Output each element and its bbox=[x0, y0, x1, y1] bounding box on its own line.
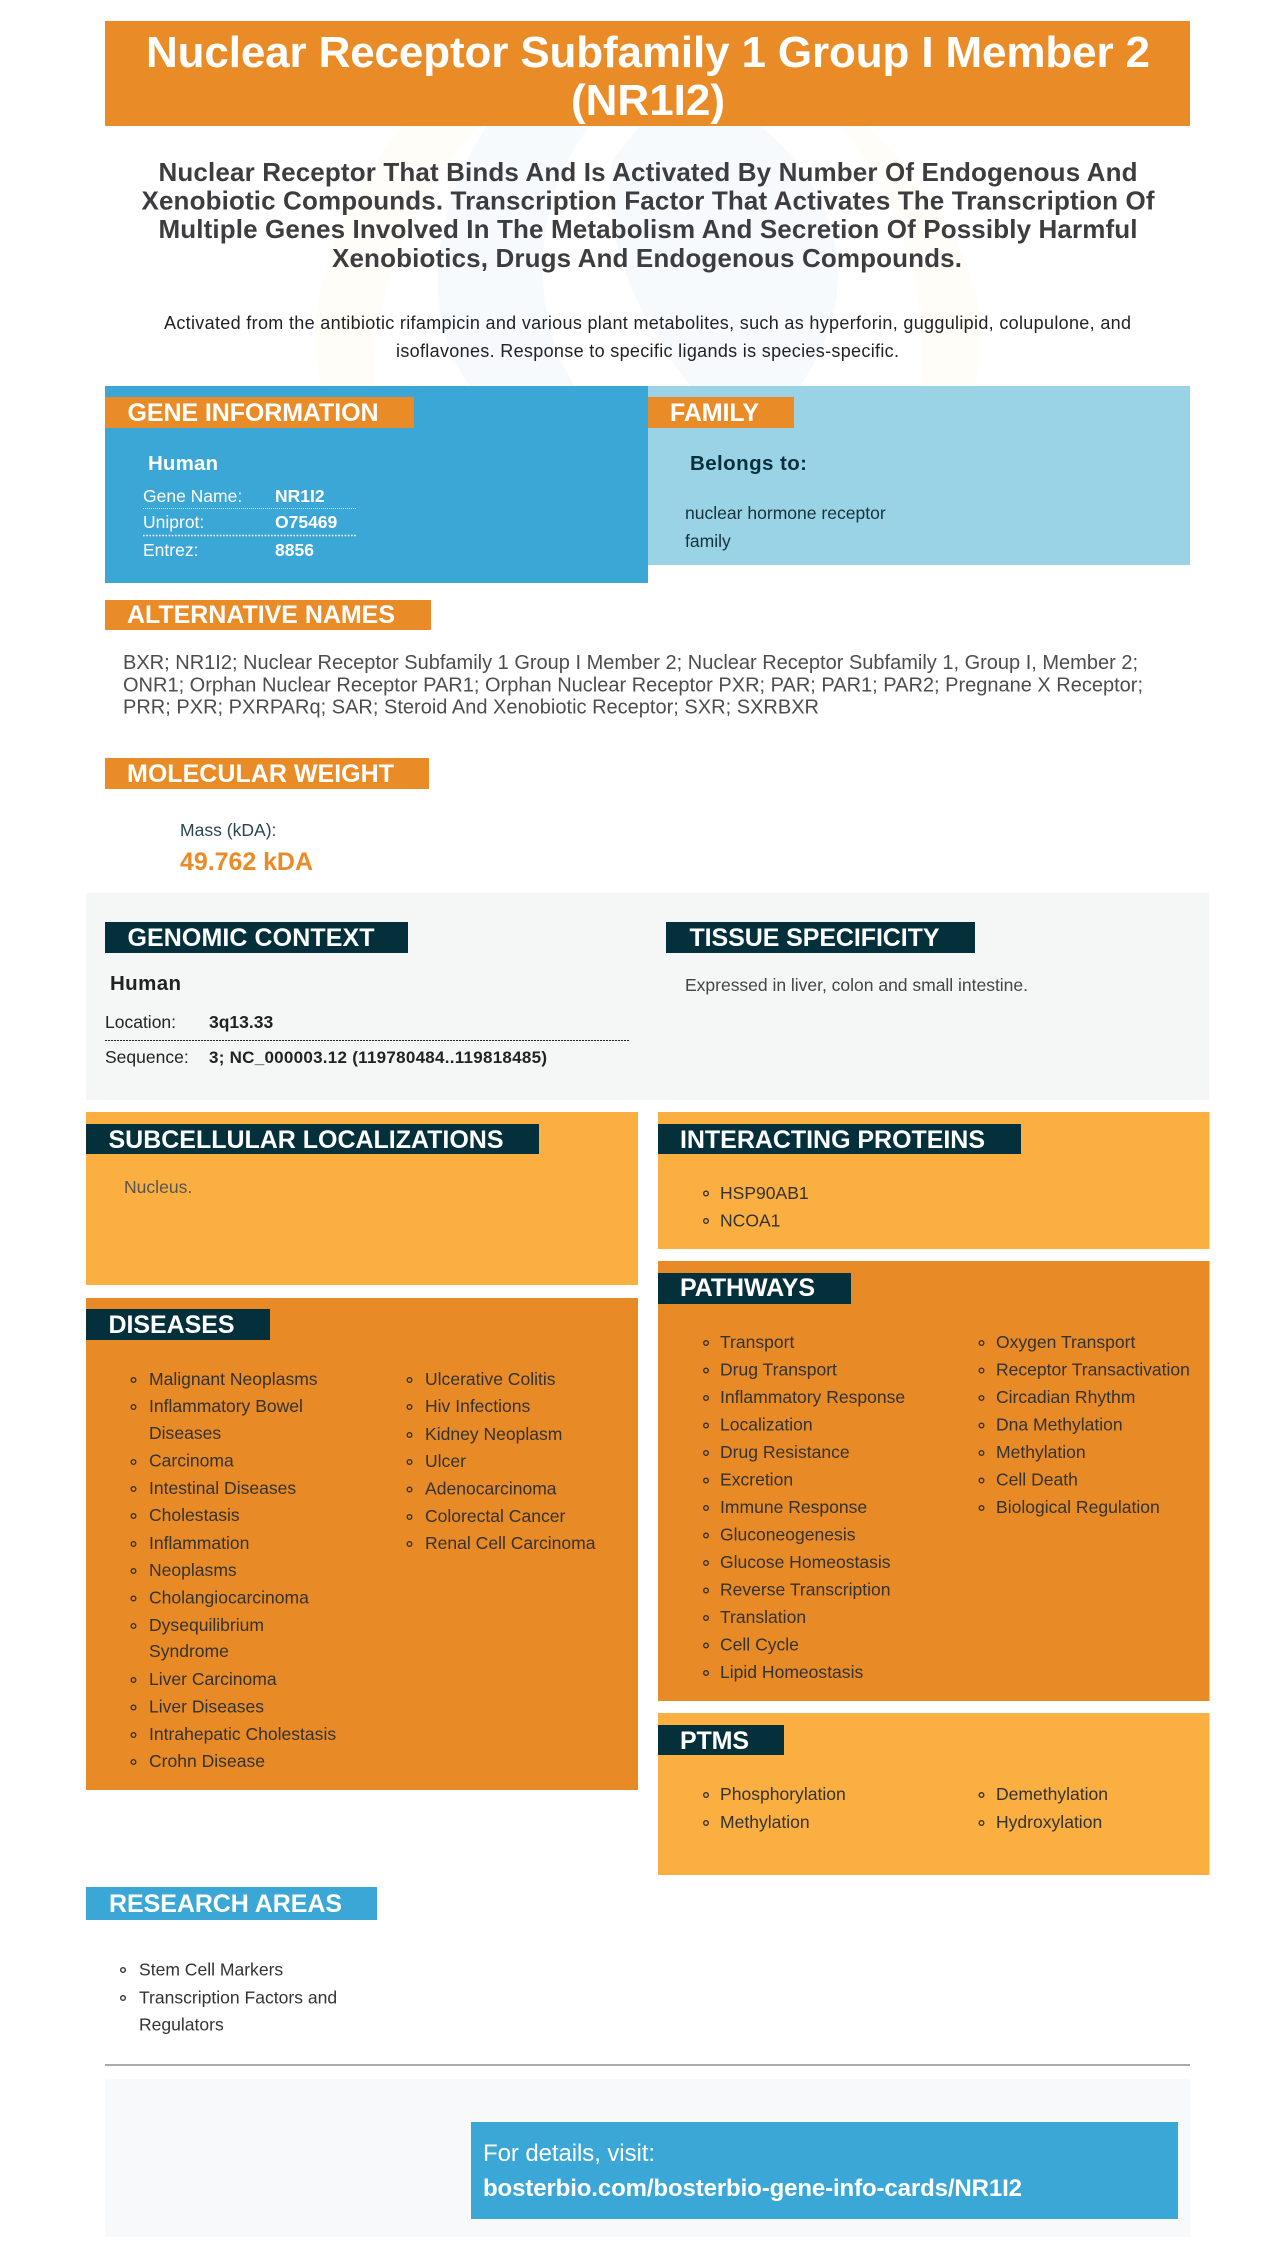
description text bbox=[164, 313, 1131, 361]
research areas list: Stem Cell Markers bbox=[139, 1960, 283, 1980]
pathways list column 2: Oxygen Transport bbox=[996, 1332, 1135, 1352]
pathways list column 1: Immune Response bbox=[720, 1497, 867, 1517]
callout: details link: bosterbio.com/bosterbio-gene-info-cards/NR1I2 bbox=[483, 2175, 1022, 2202]
tissue specificity text: Expressed in liver, colon and small intestine. bbox=[685, 975, 1028, 995]
panel: ptms bbox=[658, 1713, 1210, 1875]
diseases list column 1: Intrahepatic Cholestasis bbox=[149, 1724, 336, 1744]
species label: Human bbox=[148, 452, 218, 475]
subtitle: Xenobiotic Compounds. Transcription Factor That Activates The Transcription Of bbox=[142, 186, 1155, 216]
heading: pathways bbox=[658, 1273, 851, 1304]
localization text: Nucleus. bbox=[124, 1177, 192, 1197]
heading: alternative names: ALTERNATIVE NAMES bbox=[127, 601, 395, 629]
diseases list column 2: Adenocarcinoma bbox=[425, 1478, 557, 1498]
subtitle bbox=[142, 157, 1155, 273]
pathways list column 1: Translation bbox=[720, 1607, 806, 1627]
heading: interacting proteins: INTERACTING PROTEINS bbox=[680, 1126, 985, 1154]
title banner: Nuclear Receptor Subfamily 1 Group I Member 2 bbox=[146, 28, 1150, 77]
research areas list bbox=[121, 1960, 337, 2034]
pathways list column 1: Glucose Homeostasis bbox=[720, 1552, 891, 1572]
pathways list column 1: Drug Transport bbox=[720, 1360, 837, 1380]
diseases list column 1: Malignant Neoplasms bbox=[149, 1369, 318, 1389]
diseases list column 2: Colorectal Cancer bbox=[425, 1506, 565, 1526]
diseases list column 1: Carcinoma bbox=[149, 1450, 234, 1470]
panel: interacting proteins bbox=[658, 1112, 1210, 1249]
ptms list column 1: Phosphorylation bbox=[720, 1784, 846, 1804]
gene identifiers table: Entrez: bbox=[143, 540, 198, 560]
molecular mass value: Mass (kDA): bbox=[180, 820, 276, 840]
diseases list column 1: Dysequilibrium bbox=[149, 1615, 264, 1635]
diseases list column 1: Liver Carcinoma bbox=[149, 1669, 277, 1689]
location and sequence table: 3; NC_000003.12 (119780484..119818485) bbox=[209, 1048, 547, 1067]
diseases list column 1: Syndrome bbox=[149, 1641, 229, 1661]
diseases list column 2: Ulcer bbox=[425, 1451, 466, 1471]
pathways list column 2: Dna Methylation bbox=[996, 1414, 1123, 1434]
interacting proteins list: NCOA1 bbox=[720, 1210, 780, 1230]
pathways list column 1: Cell Cycle bbox=[720, 1634, 799, 1654]
heading: research areas bbox=[86, 1887, 377, 1920]
heading: diseases bbox=[86, 1309, 270, 1340]
diseases list column 1: Inflammatory Bowel bbox=[149, 1396, 303, 1416]
pathways list column 1: Drug Resistance bbox=[720, 1442, 850, 1462]
pathways list column 2 bbox=[979, 1332, 1190, 1517]
gene identifiers table: 8856 bbox=[275, 540, 314, 560]
heading: pathways: PATHWAYS bbox=[680, 1274, 815, 1302]
location and sequence table: 3q13.33 bbox=[209, 1012, 273, 1032]
panel: gene information bbox=[105, 386, 648, 583]
pathways list column 1: Reverse Transcription bbox=[720, 1580, 891, 1600]
location and sequence table: Location: bbox=[105, 1012, 176, 1032]
callout: details link: For details, visit: bbox=[483, 2140, 655, 2167]
subtitle: Multiple Genes Involved In The Metabolism And Secretion Of Possibly Harmful bbox=[158, 214, 1138, 244]
diseases list column 2 bbox=[407, 1369, 596, 1553]
pathways list column 1: Gluconeogenesis bbox=[720, 1524, 856, 1544]
heading: family: FAMILY bbox=[670, 399, 759, 427]
alternative names text: PRR; PXR; PXRPARq; SAR; Steroid And Xenobiotic Receptor; SXR; SXRBXR bbox=[123, 696, 819, 718]
panel: subcellular localizations bbox=[86, 1112, 638, 1285]
panel: genomic context and tissue specificity bbox=[86, 893, 1210, 1100]
diseases list column 2: Kidney Neoplasm bbox=[425, 1424, 562, 1444]
heading: diseases: DISEASES bbox=[108, 1311, 234, 1339]
alternative names text bbox=[123, 652, 1143, 718]
heading: genomic context: GENOMIC CONTEXT bbox=[128, 924, 374, 952]
pathways list column 1: Localization bbox=[720, 1414, 813, 1434]
diseases list column 1: Intestinal Diseases bbox=[149, 1478, 296, 1498]
diseases list column 1: Cholangiocarcinoma bbox=[149, 1588, 309, 1608]
gene identifiers table: NR1I2 bbox=[275, 486, 325, 506]
family name: nuclear hormone receptor bbox=[685, 503, 886, 523]
interacting proteins list: HSP90AB1 bbox=[720, 1183, 809, 1203]
gene identifiers table bbox=[143, 486, 357, 560]
description text: Activated from the antibiotic rifampicin and various plant metabolites, such as hyperforin, guggulipid, colupulone, and bbox=[164, 313, 1131, 333]
ptms list column 2 bbox=[979, 1784, 1108, 1832]
pathways list column 1: Inflammatory Response bbox=[720, 1387, 905, 1407]
molecular mass value bbox=[180, 820, 313, 876]
ptms list column 2: Hydroxylation bbox=[996, 1812, 1102, 1832]
genomic species label: Human bbox=[110, 972, 181, 995]
heading: ptms bbox=[658, 1725, 784, 1755]
heading: tissue specificity: TISSUE SPECIFICITY bbox=[690, 924, 940, 952]
pathways list column 1: Lipid Homeostasis bbox=[720, 1662, 863, 1682]
pathways list column 1: Excretion bbox=[720, 1470, 793, 1490]
heading: family bbox=[648, 397, 794, 428]
pathways list column 2: Receptor Transactivation bbox=[996, 1360, 1190, 1380]
diseases list column 2: Renal Cell Carcinoma bbox=[425, 1533, 596, 1553]
pathways list column 1 bbox=[704, 1332, 905, 1682]
pathways list column 2: Biological Regulation bbox=[996, 1497, 1160, 1517]
pathways list column 2: Circadian Rhythm bbox=[996, 1387, 1135, 1407]
pathways list column 2: Methylation bbox=[996, 1442, 1086, 1462]
description text: isoflavones. Response to specific ligands is species-specific. bbox=[396, 341, 899, 361]
diseases list column 1: Liver Diseases bbox=[149, 1696, 264, 1716]
heading: molecular weight: MOLECULAR WEIGHT bbox=[127, 760, 394, 788]
heading: gene information: GENE INFORMATION bbox=[128, 399, 378, 427]
molecular mass value: 49.762 kDA bbox=[180, 848, 313, 876]
ptms list column 1: Methylation bbox=[720, 1812, 810, 1832]
heading: research areas: RESEARCH AREAS bbox=[109, 1890, 342, 1918]
panel: family bbox=[648, 386, 1190, 565]
title banner: (NR1I2) bbox=[571, 76, 725, 125]
interacting proteins list bbox=[704, 1183, 809, 1230]
location and sequence table bbox=[105, 1012, 629, 1067]
diseases list column 1: Neoplasms bbox=[149, 1560, 237, 1580]
diseases list column 1: Crohn Disease bbox=[149, 1751, 265, 1771]
gene identifiers table: Uniprot: bbox=[143, 512, 204, 532]
panel: pathways bbox=[658, 1261, 1210, 1701]
panel: diseases bbox=[86, 1298, 638, 1790]
gene identifiers table: Gene Name: bbox=[143, 486, 242, 506]
belongs to label: Belongs to: bbox=[690, 452, 807, 475]
title banner bbox=[105, 21, 1190, 126]
diseases list column 1: Inflammation bbox=[149, 1533, 249, 1553]
gene identifiers table: O75469 bbox=[275, 512, 338, 532]
heading: ptms: PTMS bbox=[680, 1727, 749, 1755]
family name: family bbox=[685, 531, 731, 551]
callout: details link bbox=[471, 2122, 1178, 2219]
diseases list column 1 bbox=[131, 1369, 336, 1771]
subtitle: Xenobiotics, Drugs And Endogenous Compounds. bbox=[332, 243, 962, 273]
watermark logo bbox=[315, 126, 981, 386]
research areas list: Regulators bbox=[139, 2014, 224, 2034]
family name bbox=[685, 503, 886, 551]
research areas list: Transcription Factors and bbox=[139, 1988, 337, 2008]
location and sequence table: Sequence: bbox=[105, 1047, 189, 1067]
pathways list column 1: Transport bbox=[720, 1332, 794, 1352]
heading: subcellular localizations: SUBCELLULAR LOCALIZATIONS bbox=[108, 1126, 504, 1154]
diseases list column 2: Ulcerative Colitis bbox=[425, 1369, 556, 1389]
subtitle: Nuclear Receptor That Binds And Is Activated By Number Of Endogenous And bbox=[158, 157, 1138, 187]
ptms list column 2: Demethylation bbox=[996, 1784, 1108, 1804]
panel: footer bbox=[105, 2079, 1190, 2237]
alternative names text: ONR1; Orphan Nuclear Receptor PAR1; Orphan Nuclear Receptor PXR; PAR; PAR1; PAR2; Pregnane X Receptor; bbox=[123, 674, 1143, 696]
alternative names text: BXR; NR1I2; Nuclear Receptor Subfamily 1 Group I Member 2; Nuclear Receptor Subfamily 1, Group I, Member 2; bbox=[123, 652, 1138, 674]
diseases list column 1: Diseases bbox=[149, 1423, 221, 1443]
diseases list column 2: Hiv Infections bbox=[425, 1396, 530, 1416]
ptms list column 1 bbox=[704, 1784, 846, 1832]
pathways list column 2: Cell Death bbox=[996, 1470, 1078, 1490]
diseases list column 1: Cholestasis bbox=[149, 1505, 240, 1525]
